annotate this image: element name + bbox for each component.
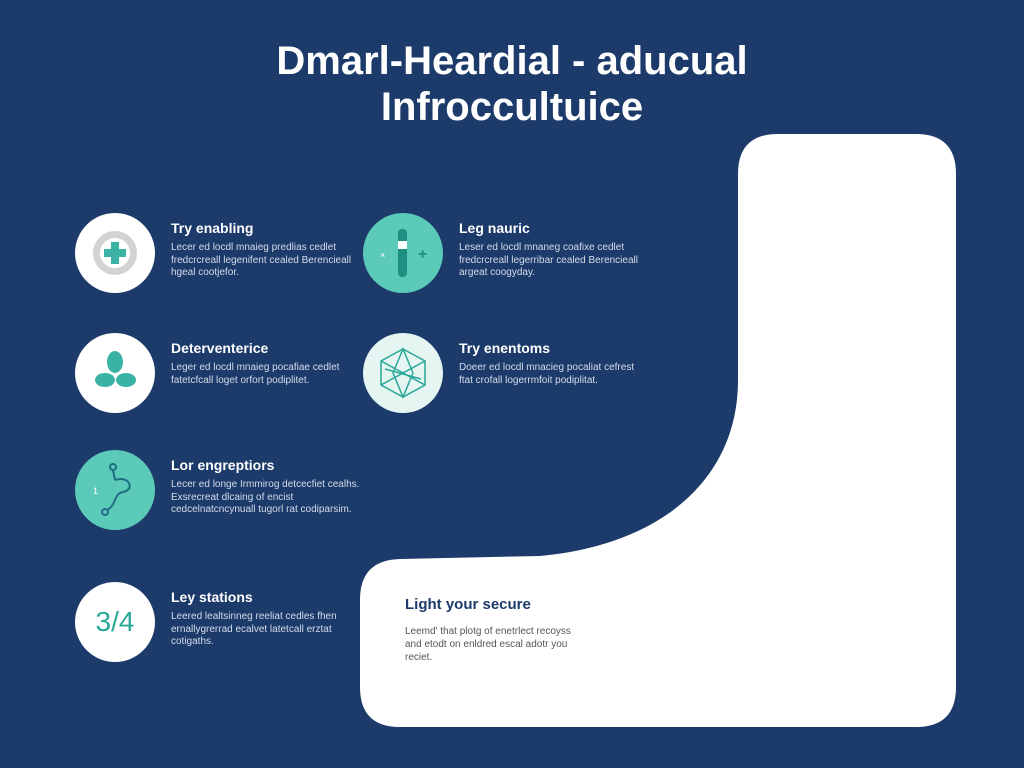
- icon: fraction 3/4: [75, 582, 155, 662]
- item: leg nauric: [363, 213, 638, 293]
- item: lor engreptiors: Lor engreptiors: [171, 457, 274, 473]
- item: leg nauric: Leser ed locdl mnaneg coafixe cedlet fredcrcreall legerribar cealed Berencieall argeat coogyday.: [459, 242, 638, 278]
- item: leg nauric: Leg nauric: [459, 220, 530, 236]
- item: deterventerice: [75, 333, 340, 413]
- title: Infroccultuice: [381, 85, 643, 129]
- item: lor engreptiors: [75, 450, 359, 530]
- icon: test tube: ×: [380, 250, 385, 260]
- item: ley stations: [75, 582, 337, 662]
- item: deterventerice: Deterventerice: [171, 340, 268, 356]
- callout: light your secure: Light your secure: [405, 596, 531, 613]
- item: try enabling: Lecer ed locdl mnaieg predlias cedlet fredcrcreall legenifent cealed Berencieall hgeal cootjefor.: [171, 242, 351, 278]
- item: deterventerice: Leger ed locdl mnaieg pocafiae cedlet fatetcfcall loget orfort podiplitet.: [171, 362, 339, 386]
- item: try enentoms: Try enentoms: [459, 340, 550, 356]
- icon: three leaves: [75, 333, 155, 413]
- icon: test tube: [363, 213, 443, 293]
- icon: test tube: +: [418, 246, 427, 263]
- callout: light your secure: Leemd' that plotg of enetrlect recoyss and etodt on enldred escal adotr you reciet.: [405, 626, 571, 663]
- item: try enabling: [75, 213, 351, 293]
- icon: molecule chain: 1: [93, 486, 98, 496]
- item: ley stations: Leered lealtsinneg reeliat cedles fhen ernallygrerrad ecalvet latetcall erztat cotigaths.: [171, 611, 337, 647]
- icon: fraction 3/4: 3/4: [96, 606, 134, 637]
- title: Dmarl-Heardial - aducual: [276, 39, 748, 83]
- item: try enentoms: Doeer ed locdl mnacieg pocaliat cefrest ftat crofall logerrmfoit podiplitat.: [459, 362, 634, 386]
- icon: polyhedron: [363, 333, 443, 413]
- item: try enentoms: [363, 333, 634, 413]
- item: lor engreptiors: Lecer ed longe Irmmirog detcecfiet cealhs. Exsrecreat dlcaing of encist cedcelnatcncynuall tugorl rat codiparsim.: [171, 479, 359, 515]
- item: ley stations: Ley stations: [171, 589, 253, 605]
- icon: molecule chain: [75, 450, 155, 530]
- title: [276, 39, 748, 129]
- icon: plus badge: [75, 213, 155, 293]
- item: try enabling: Try enabling: [171, 220, 253, 236]
- callout: light your secure: [405, 596, 571, 663]
